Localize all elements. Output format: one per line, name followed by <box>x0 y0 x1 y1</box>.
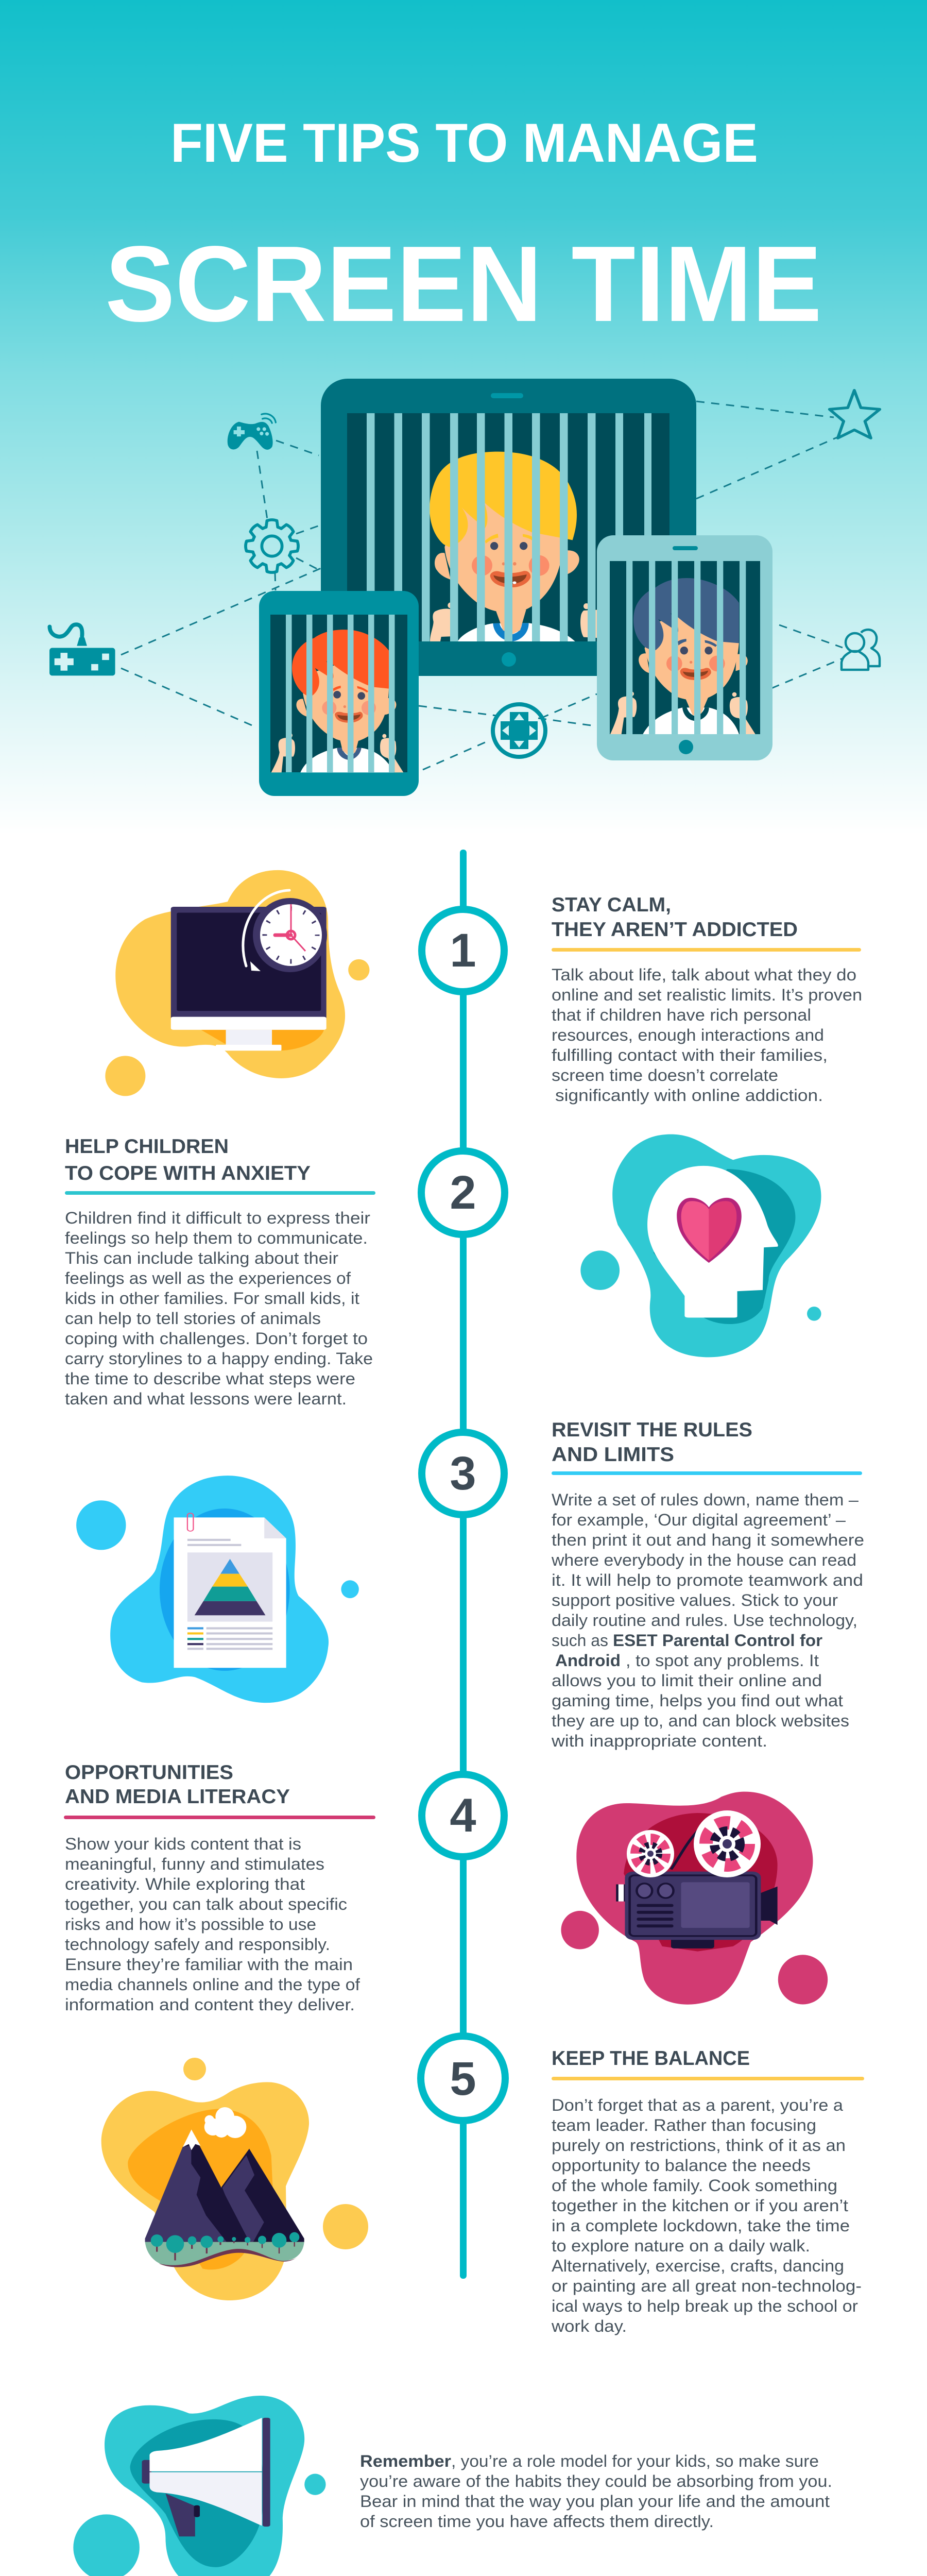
heading: STAY CALM, <box>552 894 671 916</box>
icon: heart <box>677 1198 742 1263</box>
heading <box>552 1419 752 1466</box>
small film reel <box>627 1830 674 1877</box>
body text: Alternatively, exercise, crafts, dancing <box>552 2257 844 2275</box>
small left tablet <box>259 591 419 796</box>
body text: opportunity to balance the needs <box>552 2156 811 2175</box>
body text <box>551 2096 862 2335</box>
body text: Don’t forget that as a parent, you’re a <box>552 2096 843 2114</box>
body text: Children find it difficult to express their <box>65 1209 370 1227</box>
body text: allows you to limit their online and <box>552 1671 822 1690</box>
body text: significantly with online addiction. <box>555 1086 823 1105</box>
timeline line <box>460 850 467 2279</box>
trees <box>151 2232 299 2260</box>
body text: support positive values. Stick to your <box>552 1591 838 1609</box>
panel: tip 5 <box>101 2036 864 2335</box>
body text <box>65 1835 360 2014</box>
body text: or painting are all great non-technolog- <box>552 2277 862 2295</box>
body text <box>551 1490 864 1750</box>
illustration: document with pyramid chart <box>76 1476 359 1703</box>
heading rule <box>552 948 861 952</box>
body text: in a complete lockdown, take the time <box>552 2216 850 2235</box>
body text: screen time doesn’t correlate <box>552 1066 778 1084</box>
body text: , to spot any problems. It <box>626 1651 819 1670</box>
callout text: of screen time you have affects them directly. <box>360 2512 714 2531</box>
body text: where everybody in the house can read <box>551 1551 856 1569</box>
panel: tip 1 <box>105 870 862 1105</box>
number badge 2: 2 <box>450 1166 476 1219</box>
body text: together in the kitchen or if you aren’t <box>552 2196 848 2215</box>
panel: tip 4 <box>64 1761 828 2014</box>
body text: of the whole family. Cook something <box>552 2176 837 2195</box>
body text: fulfilling contact with their families, <box>552 1046 828 1064</box>
body text: it. It will help to promote teamwork and <box>552 1571 863 1589</box>
heading: TO COPE WITH ANXIETY <box>65 1162 311 1184</box>
body text: work day. <box>551 2317 627 2335</box>
panel: tip 2 <box>65 1134 821 1408</box>
body text: ESET Parental Control for <box>613 1631 822 1650</box>
body text: meaningful, funny and stimulates <box>65 1855 324 1873</box>
heading: KEEP THE BALANCE <box>552 2047 750 2070</box>
body text: taken and what lessons were learnt. <box>65 1389 347 1408</box>
body text: feelings as well as the experiences of <box>65 1269 351 1287</box>
number badge 4: 4 <box>450 1789 476 1842</box>
illustration: monitor and clock <box>105 870 370 1096</box>
body text: technology safely and responsibly. <box>65 1935 330 1954</box>
hero illustration: network of devices with children behind bars <box>49 379 880 796</box>
body text: to explore nature on a daily walk. <box>552 2236 810 2255</box>
body text: Show your kids content that is <box>65 1835 301 1853</box>
body text: Talk about life, talk about what they do <box>552 965 856 984</box>
heading: THEY AREN’T ADDICTED <box>552 919 798 941</box>
illustration: megaphone <box>73 2396 326 2576</box>
callout text: Remember <box>360 2452 451 2470</box>
body text: Write a set of rules down, name them – <box>552 1490 859 1509</box>
dashed network connections <box>121 401 843 770</box>
body text: the time to describe what steps were <box>65 1369 355 1388</box>
body text: team leader. Rather than focusing <box>552 2116 816 2134</box>
body text: risks and how it’s possible to use <box>65 1915 316 1934</box>
body text: kids in other families. For small kids, it <box>65 1289 359 1308</box>
prison bars <box>626 561 746 734</box>
number badge 3: 3 <box>450 1447 476 1500</box>
panel: tip 3 <box>76 1419 864 1750</box>
illustration: head with heart <box>580 1134 821 1357</box>
body text: media channels online and the type of <box>65 1975 360 1994</box>
illustration: film projector <box>561 1792 828 2005</box>
body text: ical ways to help break up the school or <box>552 2297 858 2315</box>
dark-haired boy <box>610 578 756 734</box>
body text: This can include talking about their <box>65 1249 338 1267</box>
blond boy <box>430 452 599 641</box>
heading: AND MEDIA LITERACY <box>65 1786 290 1808</box>
body text: can help to tell stories of animals <box>65 1309 321 1328</box>
callout text: , you’re a role model for your kids, so make sure <box>451 2452 819 2470</box>
body text: with inappropriate content. <box>551 1732 767 1750</box>
heading <box>65 1761 290 1808</box>
callout text: Bear in mind that the way you plan your life and the amount <box>360 2492 830 2511</box>
icon: star <box>830 391 880 438</box>
body text: feelings so help them to communicate. <box>65 1229 368 1247</box>
icon: d-pad <box>493 704 545 757</box>
title <box>105 112 822 344</box>
callout text <box>360 2452 832 2531</box>
title: FIVE TIPS TO MANAGE <box>170 112 758 174</box>
body text: gaming time, helps you find out what <box>552 1691 843 1710</box>
heading: AND LIMITS <box>552 1444 674 1466</box>
body text: for example, ‘Our digital agreement’ – <box>552 1511 846 1529</box>
body text: Android <box>555 1651 621 1670</box>
body text: together, you can talk about specific <box>65 1895 347 1913</box>
heading: HELP CHILDREN <box>65 1136 229 1158</box>
body text <box>65 1209 373 1408</box>
icon: wired gamepad <box>49 624 115 675</box>
icon: people <box>842 630 880 670</box>
body text: that if children have rich personal <box>552 1006 811 1024</box>
heading <box>552 894 798 941</box>
body text: Ensure they’re familiar with the main <box>65 1955 353 1974</box>
panel: remember callout <box>73 2396 832 2576</box>
callout text: you’re aware of the habits they could be absorbing from you. <box>360 2472 832 2490</box>
right tablet <box>597 535 772 760</box>
body text: purely on restrictions, think of it as an <box>552 2136 846 2155</box>
body text: online and set realistic limits. It’s proven <box>552 986 862 1004</box>
large film reel <box>694 1810 761 1877</box>
icon: wireless game controller <box>228 414 276 450</box>
title: SCREEN TIME <box>105 224 822 344</box>
heading rule <box>65 1191 375 1195</box>
heading: REVISIT THE RULES <box>552 1419 752 1441</box>
heading rule <box>552 2077 864 2080</box>
number badge 2 <box>421 1151 505 1234</box>
number badge 3 <box>422 1432 504 1515</box>
body text: carry storylines to a happy ending. Take <box>65 1349 373 1368</box>
body text: information and content they deliver. <box>65 1995 355 2014</box>
number badge 5: 5 <box>450 2053 476 2105</box>
body text: daily routine and rules. Use technology, <box>552 1611 857 1630</box>
number badge 5 <box>421 2036 505 2121</box>
body text <box>552 965 862 1105</box>
hero gradient background <box>0 0 927 835</box>
prison bars <box>286 615 394 772</box>
body text: such as <box>552 1631 608 1650</box>
body text: coping with challenges. Don’t forget to <box>65 1329 368 1348</box>
body text: then print it out and hang it somewhere <box>552 1531 864 1549</box>
prison bars <box>367 413 651 641</box>
number badge 1 <box>422 909 504 992</box>
body text: they are up to, and can block websites <box>552 1711 849 1730</box>
decorative dots <box>183 2058 368 2249</box>
heading <box>65 1136 311 1184</box>
body text: resources, enough interactions and <box>552 1026 824 1044</box>
number badge 4 <box>422 1774 504 1857</box>
number badge 1: 1 <box>450 924 476 977</box>
large tablet <box>321 379 696 676</box>
heading: OPPORTUNITIES <box>65 1761 233 1784</box>
red-haired boy <box>271 630 403 772</box>
body text: creativity. While exploring that <box>65 1875 305 1893</box>
heading rule <box>64 1816 375 1819</box>
icon: settings gear <box>246 520 298 572</box>
heading rule <box>552 1471 862 1475</box>
illustration: mountains <box>101 2082 309 2300</box>
